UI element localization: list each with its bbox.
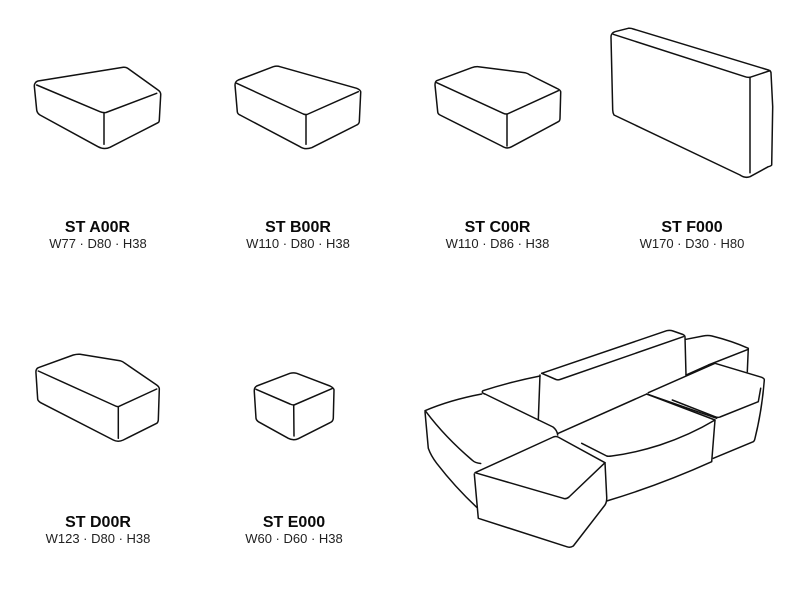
label: ST C00R: ST C00R <box>465 219 531 236</box>
module: ST D00R <box>36 354 159 546</box>
label: ST A00R: ST A00R <box>65 219 131 236</box>
icon: ST E000 outline <box>254 373 334 440</box>
icon: ST F000 outline <box>611 28 773 177</box>
module: ST A00R <box>34 67 161 251</box>
icon: ST A00R outline <box>34 67 161 149</box>
sofa: left seat <box>425 394 558 507</box>
sofa: rear right backrest <box>686 336 748 375</box>
dimensions: ST C00R: W110 · D86 · H38 <box>446 236 549 251</box>
module: ST E000 <box>245 373 343 546</box>
sofa: right seat <box>647 363 764 458</box>
icon: ST C00R outline <box>435 67 561 148</box>
module: ST C00R <box>435 67 561 251</box>
label: ST B00R: ST B00R <box>265 219 331 236</box>
label: ST F000: ST F000 <box>661 219 723 236</box>
dimensions: ST F000: W170 · D30 · H80 <box>640 236 744 251</box>
module: ST F000 <box>611 28 773 251</box>
label: ST E000: ST E000 <box>263 514 325 531</box>
dimensions: ST D00R: W123 · D80 · H38 <box>46 531 150 546</box>
dimensions: ST E000: W60 · D60 · H38 <box>245 531 343 546</box>
dimensions: ST A00R: W77 · D80 · H38 <box>49 236 147 251</box>
sofa: left rear backrest <box>482 376 540 394</box>
sofa: front ottoman <box>474 436 607 547</box>
dimensions: ST B00R: W110 · D80 · H38 <box>246 236 350 251</box>
label: ST D00R: ST D00R <box>65 514 131 531</box>
sofa: central backrest <box>538 330 686 420</box>
module: ST B00R <box>235 66 361 251</box>
icon: ST B00R outline <box>235 66 361 149</box>
icon: ST D00R outline <box>36 354 159 441</box>
illustration: assembled modular sofa <box>425 330 764 547</box>
sofa: middle seat <box>558 394 715 501</box>
